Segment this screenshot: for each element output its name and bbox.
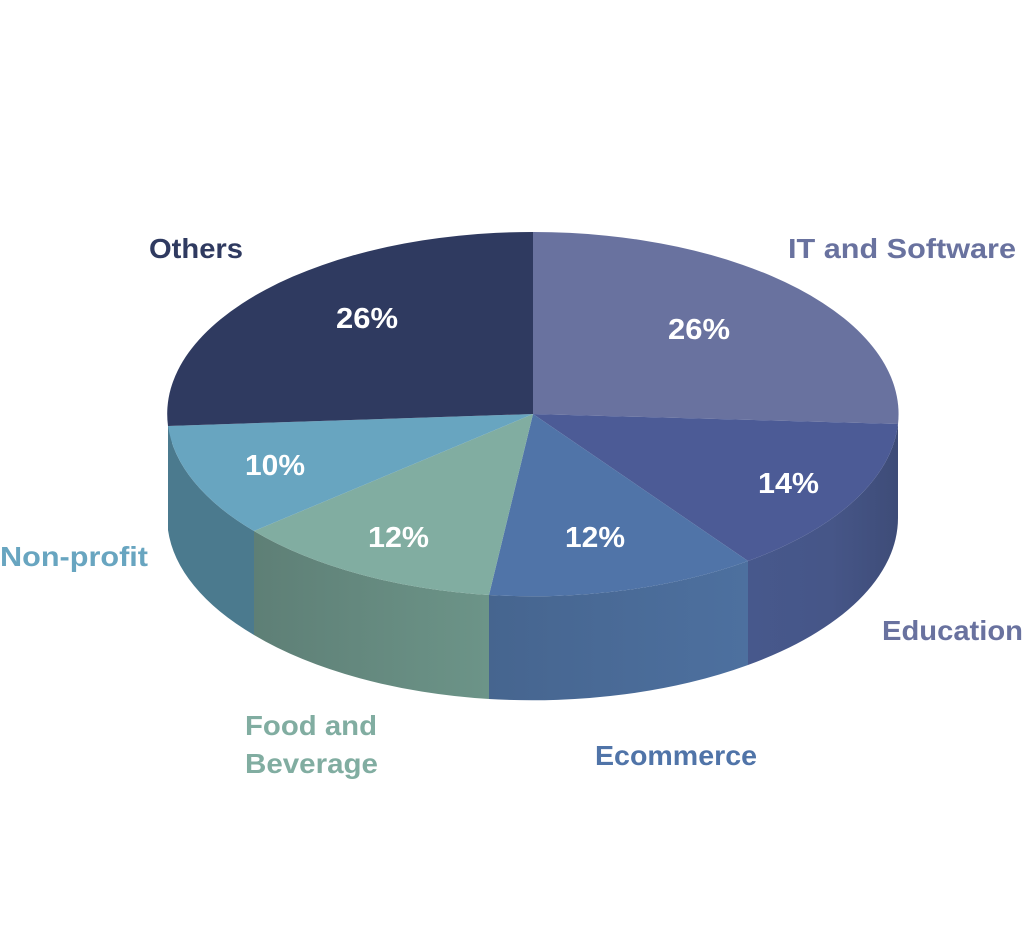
side: non-profit [168, 426, 254, 635]
side: ecommerce [489, 561, 748, 700]
value: Non-profit 10%: 10% [245, 450, 305, 482]
slice: Education [533, 414, 898, 561]
value: Others 26%: 26% [336, 303, 398, 335]
value: Food and Beverage 12%: 12% [368, 522, 429, 554]
slice: Food and Beverage [254, 414, 533, 595]
slice: Ecommerce [489, 414, 748, 596]
slice: Others [167, 232, 533, 426]
label: Food and Beverage: Food and [245, 710, 377, 741]
side: education [748, 424, 898, 665]
slice: IT and Software [533, 232, 899, 424]
label: Others: Others [149, 233, 243, 264]
label: Education: Education [882, 615, 1023, 646]
side: food and beverage [254, 531, 489, 699]
label: IT and Software: IT and Software [788, 233, 1016, 264]
slice: Non-profit [168, 414, 533, 531]
label: Food and Beverage: Beverage [245, 748, 378, 779]
label: Ecommerce: Ecommerce [595, 740, 757, 771]
value: Ecommerce 12%: 12% [565, 522, 625, 554]
value: IT and Software 26%: 26% [668, 314, 730, 346]
side: others edge [168, 426, 172, 530]
label: Non-profit: Non-profit [0, 541, 148, 572]
value: Education 14%: 14% [758, 468, 819, 500]
label: Food and Beverage [245, 710, 378, 779]
